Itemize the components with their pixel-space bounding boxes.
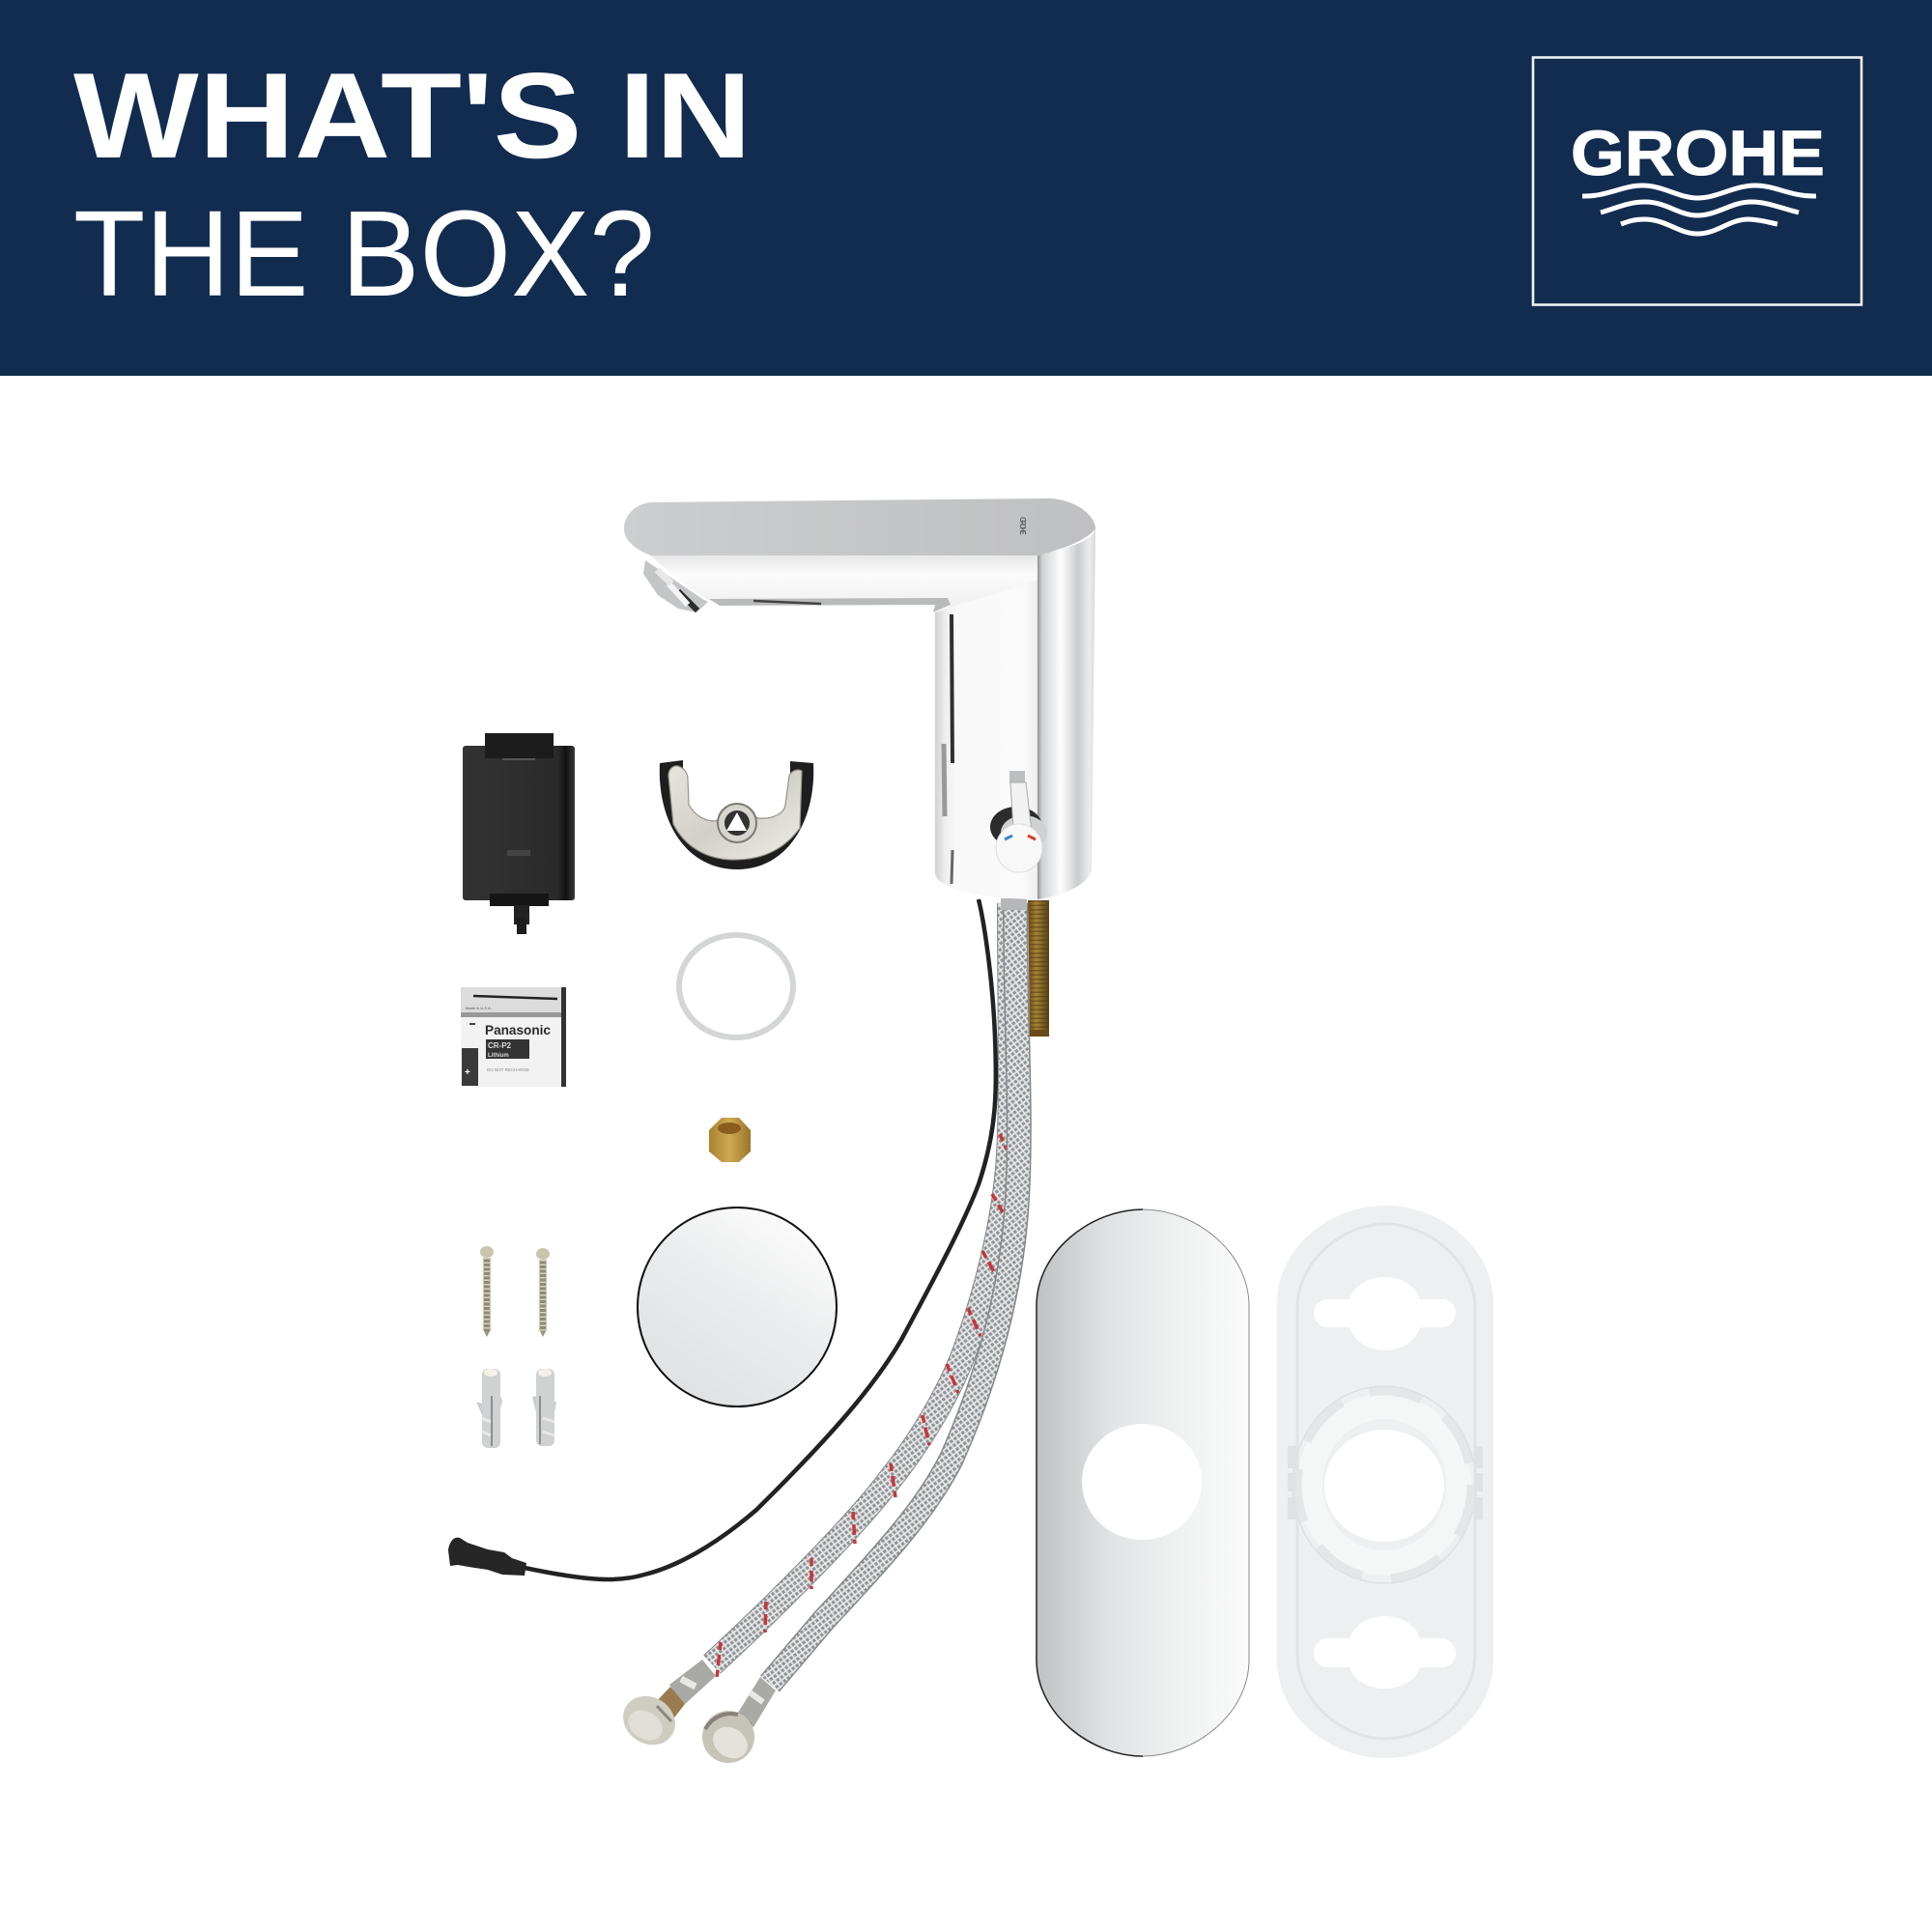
cover disc bbox=[638, 1208, 837, 1406]
spout top surface bbox=[624, 498, 1095, 555]
faucet body right bbox=[1037, 529, 1095, 899]
battery: Lithium bbox=[488, 1053, 509, 1059]
wall plug 2 bbox=[532, 1369, 556, 1446]
sensor cable bbox=[448, 899, 996, 1579]
mounting clip bbox=[660, 760, 813, 869]
hose end fitting 2 bbox=[702, 1677, 776, 1765]
title: THE BOX?: THE BOX? bbox=[73, 185, 655, 322]
spout front bbox=[649, 554, 1037, 607]
battery bbox=[461, 987, 566, 1087]
seal ring bbox=[679, 935, 793, 1037]
header banner bbox=[0, 0, 1932, 376]
faucet bbox=[624, 498, 1095, 899]
faucet body left bbox=[935, 551, 1037, 899]
aerator bbox=[643, 560, 708, 612]
centre ring of backing plate bbox=[1293, 1386, 1476, 1583]
small logo on top: GROHE bbox=[1018, 517, 1027, 536]
hose plain bbox=[770, 903, 1019, 1684]
plastic backing plate bbox=[1277, 1206, 1493, 1758]
battery box bbox=[463, 733, 575, 934]
cable connector bbox=[448, 1538, 526, 1576]
underside chrome strip bbox=[709, 598, 951, 612]
battery: CR-P2 bbox=[488, 1041, 512, 1050]
screw 1 bbox=[480, 1246, 494, 1337]
hose top collar bbox=[1001, 898, 1027, 910]
chrome cover plate bbox=[1037, 1209, 1249, 1756]
screw 2 bbox=[536, 1248, 550, 1337]
battery: Panasonic bbox=[485, 1022, 551, 1037]
GROHE logo: GROHE bbox=[1571, 117, 1825, 188]
flexible hoses bbox=[712, 898, 1027, 1684]
battery: DO NOT RECHARGE bbox=[487, 1067, 529, 1072]
temperature handle bbox=[990, 771, 1047, 872]
GROHE logo bbox=[1533, 58, 1861, 305]
title: WHAT'S IN: WHAT'S IN bbox=[73, 47, 752, 184]
threaded mounting rod bbox=[1028, 900, 1049, 1037]
hose end fitting 1 bbox=[613, 1660, 716, 1754]
battery: + bbox=[465, 1067, 470, 1078]
hose with red stripes bbox=[712, 903, 1010, 1678]
body dark reflection bbox=[944, 614, 952, 884]
battery: Made in U.S.A. bbox=[466, 1006, 492, 1010]
brass nut bbox=[709, 1118, 751, 1162]
wall plug 1 bbox=[476, 1369, 502, 1448]
